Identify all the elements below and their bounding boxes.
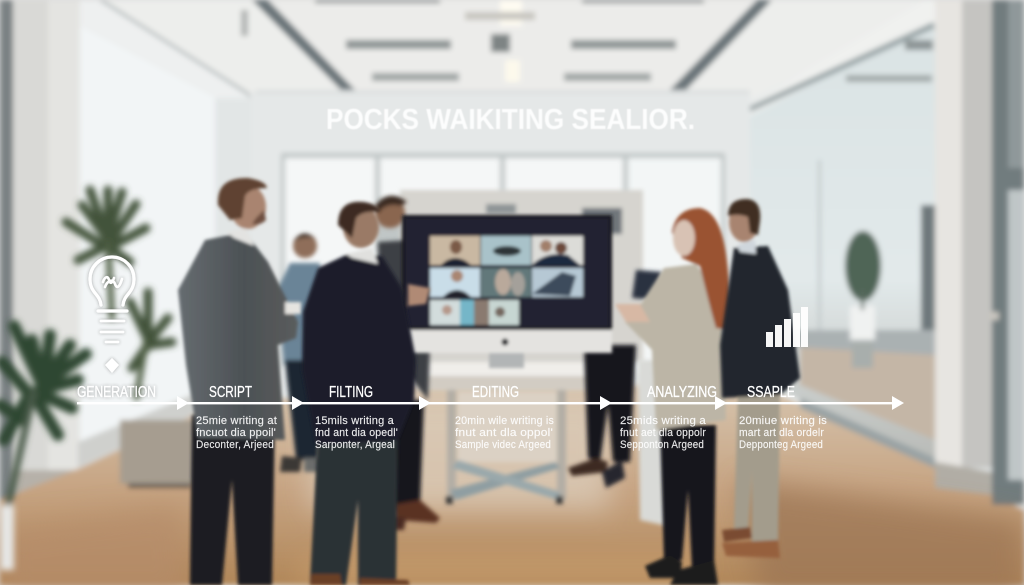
step: analyzing [620, 384, 717, 451]
person in blue shirt [277, 233, 328, 472]
video call tiles [430, 236, 583, 325]
floor reflections [0, 400, 1024, 585]
far plant in pot [845, 231, 881, 368]
man in grey suit [178, 178, 301, 585]
floor [0, 385, 1024, 585]
icon: light bulb [90, 257, 134, 342]
step: ssaple: 20miue writing is [739, 415, 827, 427]
step: script: fncuot dia ppoil' [196, 427, 276, 439]
plants [0, 190, 172, 570]
monitor chin [402, 328, 612, 353]
step: editing: EDITING [472, 384, 519, 401]
icon: bar chart [766, 307, 808, 347]
step: analyzing: Sepponton Argeed [620, 439, 704, 451]
step: script [196, 384, 277, 451]
whiteboard behind monitor [400, 190, 643, 362]
step: editing: 20min wile writing is [455, 415, 554, 427]
step: ssaple: mart art dla ordelr [739, 427, 824, 439]
right glass wall [750, 0, 1024, 505]
step: filting: Sarponter, Argeal [315, 439, 395, 451]
man on right [720, 199, 800, 558]
back wall and windows [250, 94, 750, 390]
monitor screen [402, 215, 612, 330]
icon: diamond spark [105, 358, 119, 373]
woman with red hair [615, 208, 730, 585]
man behind with dark suit [375, 196, 440, 530]
step: ssaple: SSAPLE [747, 384, 795, 401]
step: script: Deconter, Arjeed [196, 439, 274, 451]
table [416, 352, 600, 504]
step: filting: 15mils writing a [315, 415, 395, 427]
step: analyzing: ANALYZING [647, 384, 717, 401]
ceiling [80, 0, 940, 100]
pedestal [638, 360, 672, 527]
step: ssaple [739, 384, 827, 451]
step: filting: fnd ant dia opedl' [315, 427, 398, 439]
monitor stand [489, 350, 524, 368]
step: generation: GENERATION [77, 384, 156, 401]
step: analyzing: fnut aet dla oppolr [620, 427, 706, 439]
tablet held by woman [632, 270, 662, 300]
monitor [402, 215, 612, 368]
step: editing: fnut ant dla oppol' [455, 427, 553, 439]
man in navy suit [302, 202, 430, 585]
step: analyzing: 25mids writing a [620, 415, 707, 427]
timeline arrow [77, 396, 904, 410]
left wall [0, 0, 252, 500]
step: filting: FILTING [329, 384, 373, 401]
person behind monitor [568, 345, 636, 488]
step: editing [455, 384, 554, 451]
step: editing: Sample videc Argeed [455, 439, 551, 451]
title: POCKS WAIKITING SEALIOR. [326, 104, 695, 136]
bench [120, 420, 198, 488]
step: ssaple: Depponteg Argeed [739, 439, 823, 451]
step: script: SCRIPT [209, 384, 252, 401]
step: script: 25mie writing at [196, 415, 277, 427]
step: filting [315, 384, 398, 451]
